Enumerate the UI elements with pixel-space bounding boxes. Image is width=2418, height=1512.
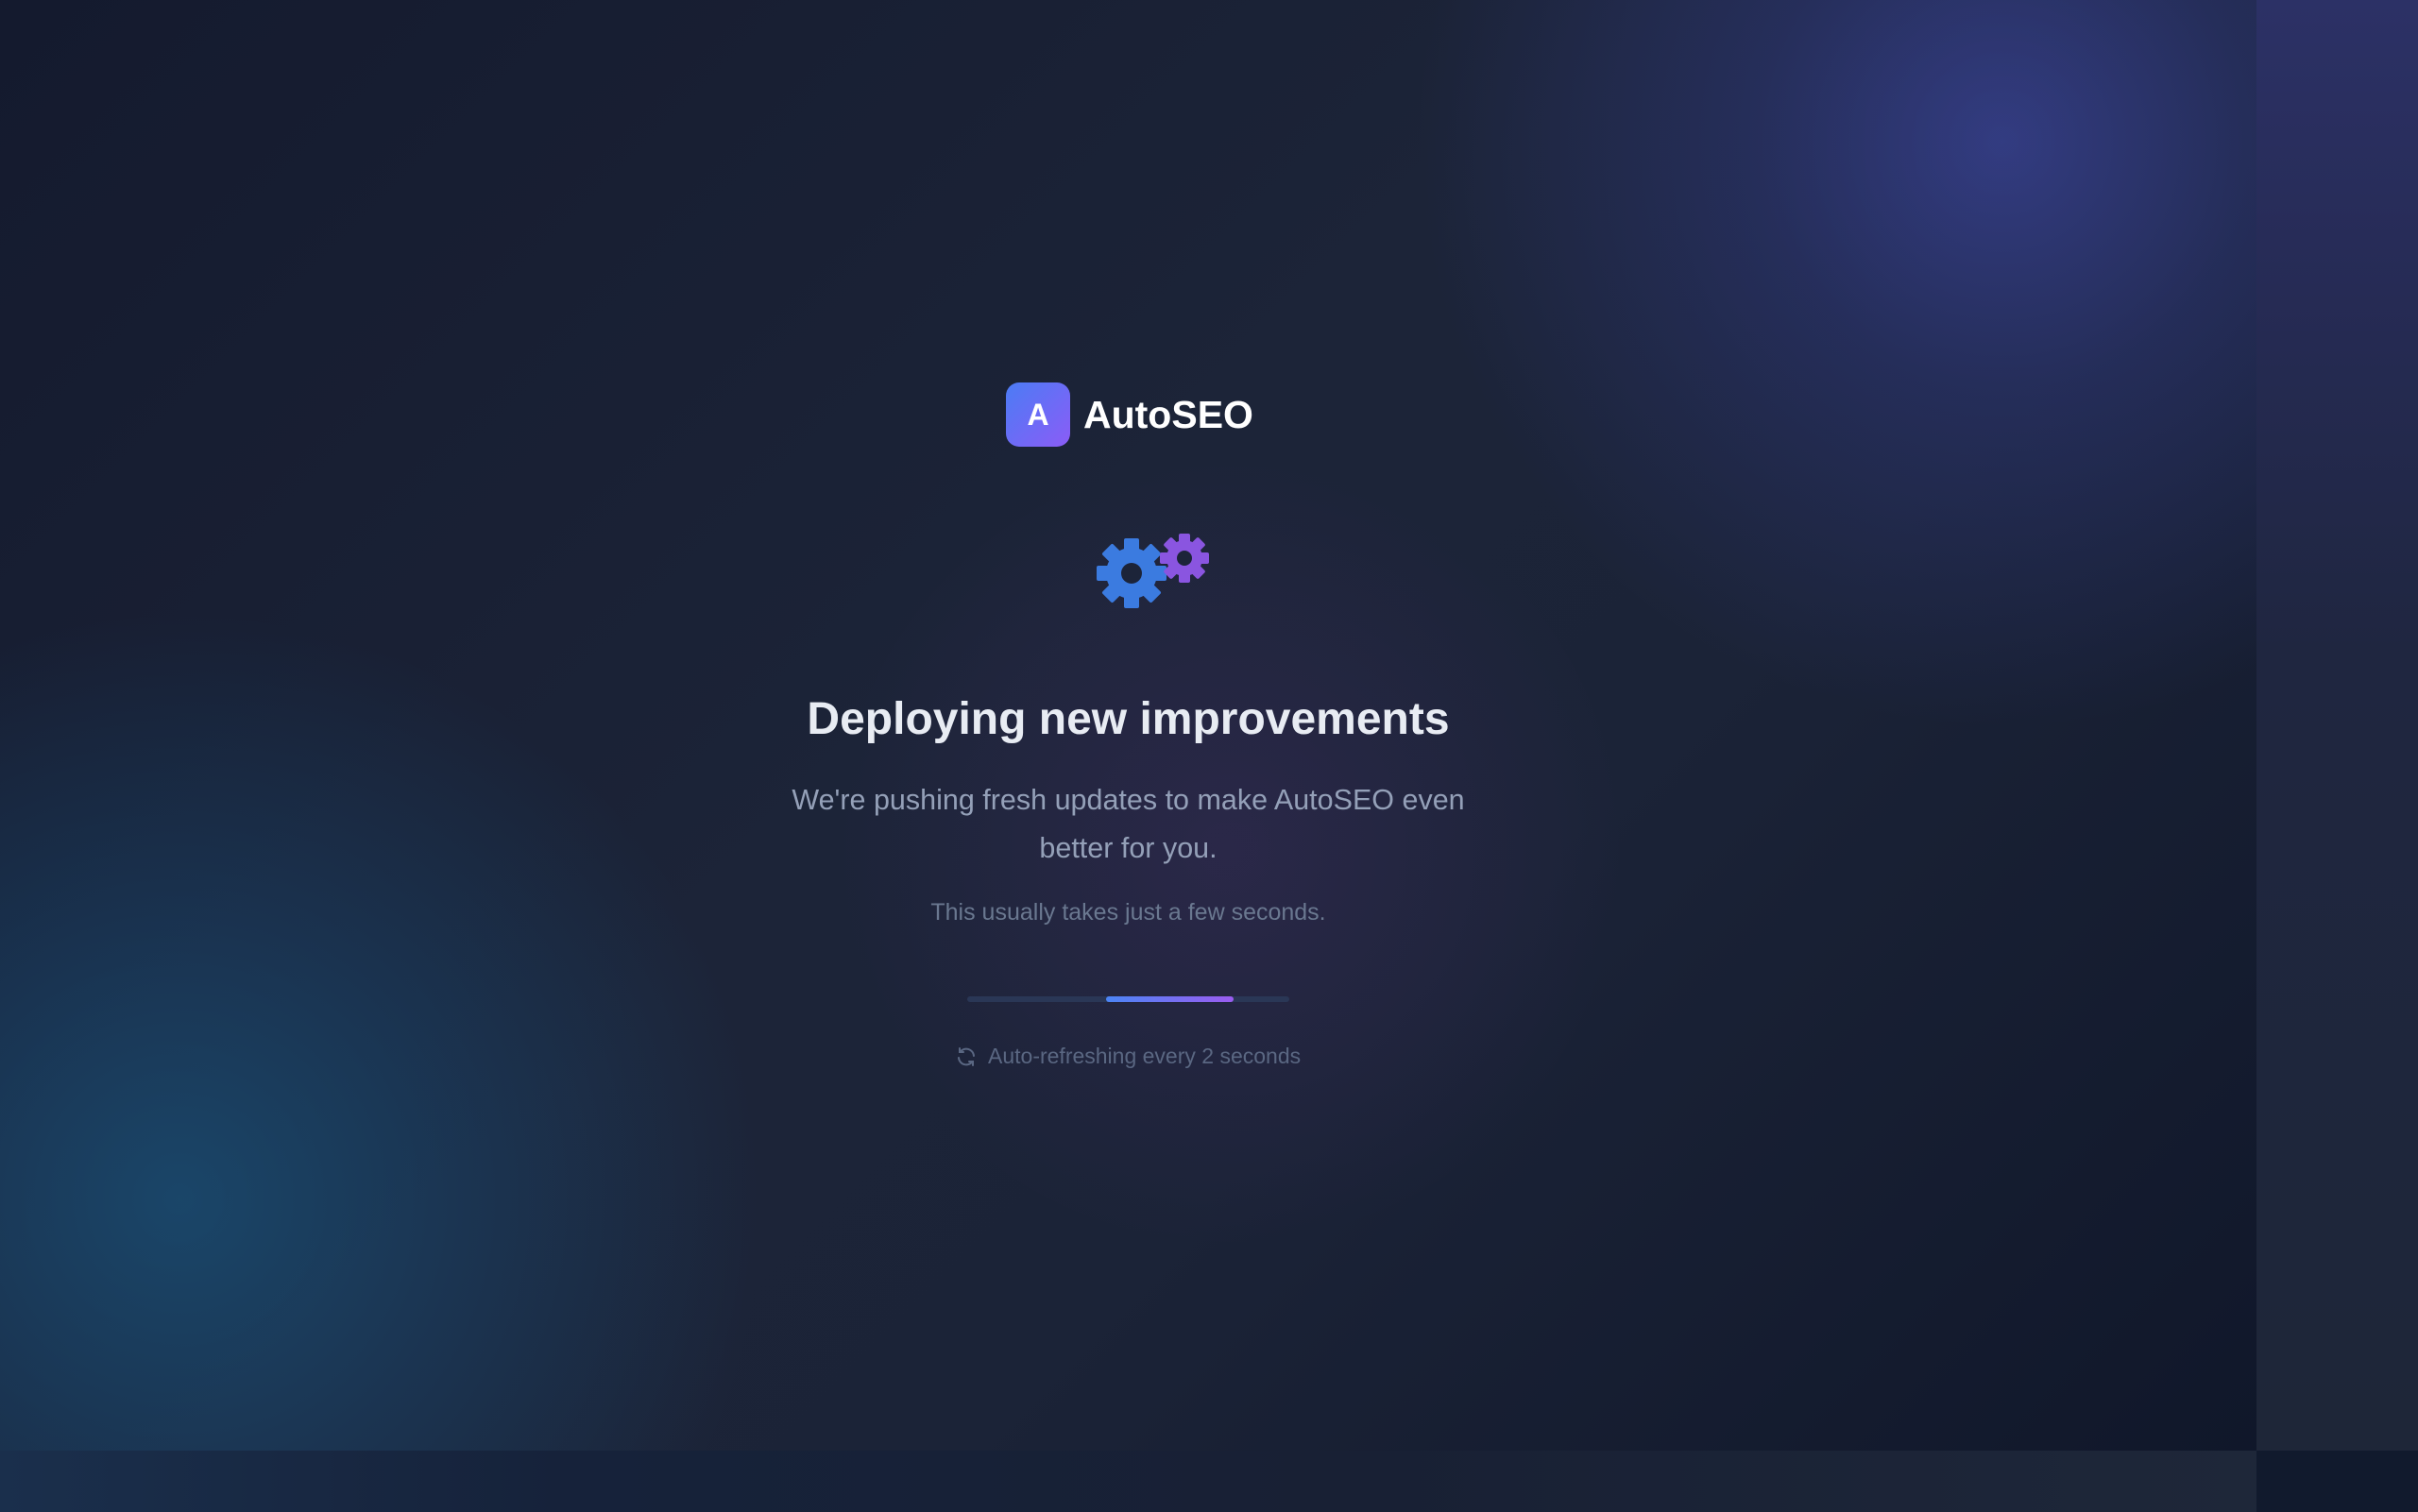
note: This usually takes just a few seconds. (930, 899, 1326, 926)
heading: Deploying new improvements (807, 694, 1450, 744)
logo icon: A (1027, 398, 1049, 432)
icon: refresh (958, 1047, 975, 1066)
logo icon (1006, 382, 1070, 447)
logo text: AutoSEO (1083, 393, 1253, 436)
auto-refresh note: Auto-refreshing every 2 seconds (988, 1044, 1301, 1068)
icon: gears (1097, 534, 1209, 608)
description: We're pushing fresh updates to make AutoSEO even (792, 784, 1465, 816)
description: better for you. (1039, 832, 1218, 864)
logo (1006, 382, 1253, 447)
description (792, 784, 1465, 864)
progress bar (967, 996, 1289, 1002)
